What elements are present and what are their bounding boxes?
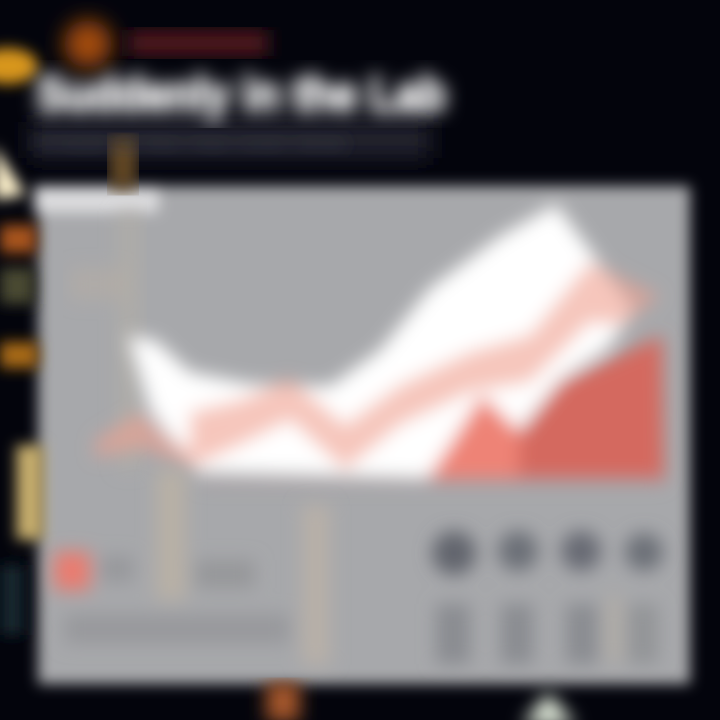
main panel <box>34 186 690 684</box>
lower panel details <box>54 470 663 665</box>
stat circles <box>432 531 476 575</box>
vertical light strips <box>156 470 186 600</box>
white area series <box>128 204 634 478</box>
chart baseline <box>200 478 660 484</box>
subtitle: A look at the rise over time <box>36 133 346 155</box>
panel label tab <box>34 186 158 212</box>
header tag <box>128 30 268 56</box>
left edge decoration <box>0 48 44 635</box>
red area series <box>425 336 664 482</box>
salmon band series <box>95 262 660 470</box>
area chart <box>95 204 664 484</box>
left column tint <box>70 210 140 470</box>
title: Suddenly in the Lab <box>36 66 446 122</box>
connector glow <box>110 138 136 190</box>
header logo dot <box>64 20 112 68</box>
legend text <box>100 556 134 582</box>
bottom edge decorations <box>266 682 576 720</box>
footnote bar <box>64 614 290 644</box>
legend swatch <box>54 552 90 590</box>
stat columns <box>436 604 470 664</box>
header glow band behind subtitle <box>30 122 430 158</box>
